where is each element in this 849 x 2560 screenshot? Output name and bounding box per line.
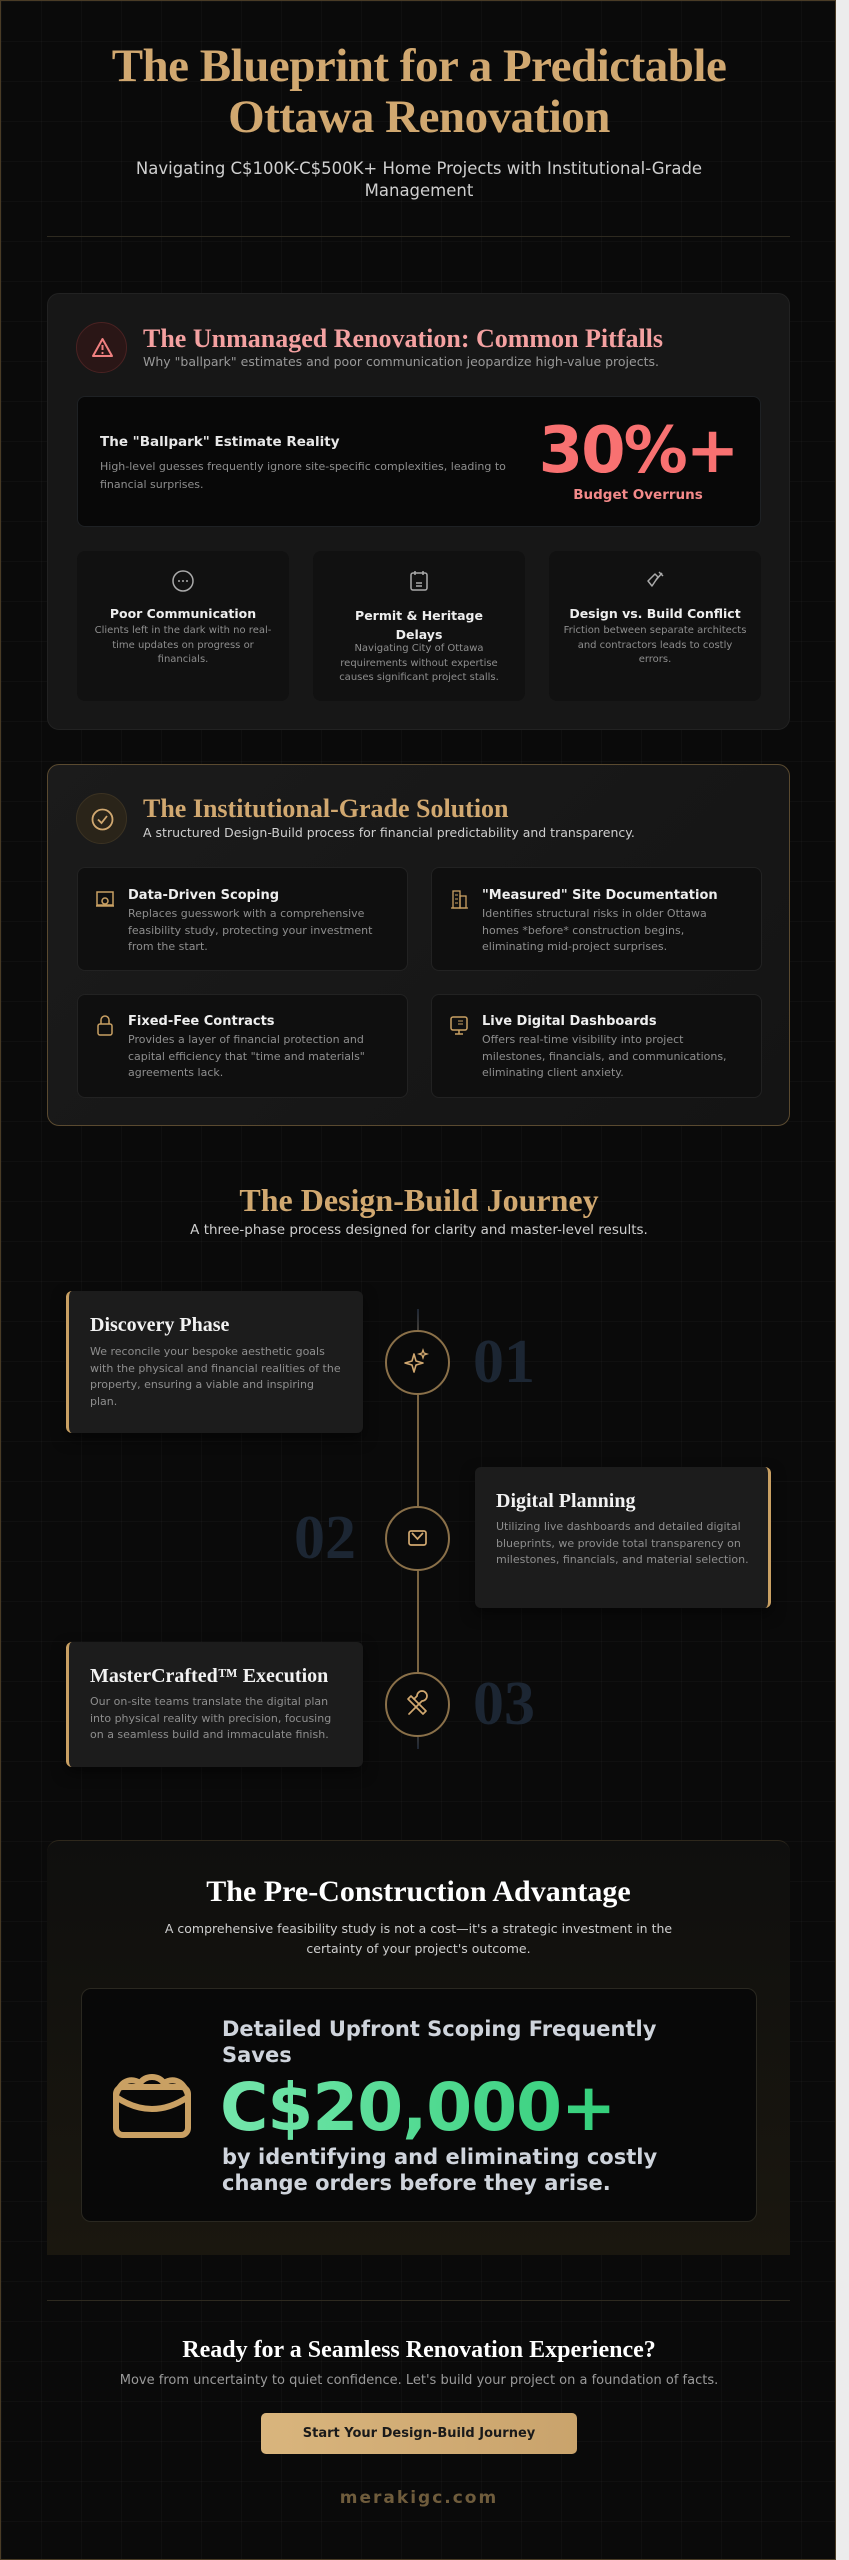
card: data-driven: Replaces guesswork with a comprehensive feasibility study, protecting your investment from the start. [128, 907, 372, 953]
CTA button [261, 2413, 577, 2454]
title: Ottawa Renovation [228, 91, 610, 143]
heading: The Institutional-Grade Solution [143, 794, 509, 823]
phase 1 card: We reconcile your bespoke aesthetic goals with the physical and financial realities of the property, ensuring a viable and inspiring plan. [90, 1345, 341, 1408]
icon: treasure chest [113, 2074, 191, 2138]
card: permit delays: Permit & Heritage [355, 608, 483, 623]
card: dashboards: Live Digital Dashboards [482, 1014, 657, 1029]
card: poor communication [77, 551, 289, 701]
savings box [81, 1988, 757, 2222]
timeline [66, 1291, 771, 1767]
phase 2 card: Digital Planning [496, 1490, 635, 1512]
stat box: Budget Overruns [573, 487, 703, 503]
card: fixed-fee: Fixed-Fee Contracts [128, 1014, 275, 1029]
panel: solution [47, 764, 790, 1126]
subheading: Why "ballpark" estimates and poor communication jeopardize high-value projects. [143, 354, 659, 369]
heading: The Unmanaged Renovation: Common Pitfalls [143, 324, 663, 353]
title: The Blueprint for a Predictable [112, 40, 726, 92]
icon: sparkles [385, 1330, 450, 1395]
savings box: by identifying and eliminating costly change orders before they arise. [222, 2145, 657, 2195]
card: permit delays [313, 551, 525, 701]
icon: envelope [385, 1506, 450, 1571]
phase 3 card: MasterCrafted™ Execution [90, 1665, 328, 1687]
journey heading: The Design-Build Journey [239, 1182, 599, 1218]
phase 1 card [66, 1291, 363, 1433]
card: fixed-fee: Provides a layer of financial protection and capital efficiency that "time and materials" agreements lack. [128, 1033, 365, 1079]
panel: pitfalls [47, 293, 790, 730]
icon: check [76, 793, 127, 844]
card: design vs build [549, 551, 761, 701]
heading: The Pre-Construction Advantage [206, 1875, 631, 1908]
stat box [77, 396, 761, 527]
card: design vs build: Friction between separate architects and contractors leads to costly errors. [564, 625, 746, 665]
phase 1 card: Discovery Phase [90, 1314, 229, 1336]
phase 3 card: Our on-site teams translate the digital plan into physical reality with precision, focusing on a seamless build and immaculate finish. [90, 1695, 331, 1741]
card: measured: "Measured" Site Documentation [482, 888, 718, 903]
card: fixed-fee [77, 994, 408, 1098]
card: dashboards [431, 994, 762, 1098]
journey subheading: A three-phase process designed for clarity and master-level results. [190, 1222, 648, 1238]
panel: pre-construction advantage [47, 1840, 790, 2255]
card: poor communication: Clients left in the dark with no real-time updates on progress or financials. [95, 625, 271, 665]
card: data-driven: Data-Driven Scoping [128, 888, 279, 903]
number 03: 03 [473, 1670, 535, 1738]
stat box: The "Ballpark" Estimate Reality [100, 434, 340, 450]
stat box: High-level guesses frequently ignore site-specific complexities, leading to financial surprises. [100, 460, 506, 491]
CTA heading: Ready for a Seamless Renovation Experience? [182, 2337, 656, 2363]
footer brand: merakigc.com [340, 2488, 498, 2508]
big stat 30%+: 30%+ [539, 414, 737, 488]
CTA text: Move from uncertainty to quiet confidence. Let's build your project on a foundation of facts. [120, 2373, 718, 2388]
phase 3 card [66, 1642, 363, 1767]
card: dashboards: Offers real-time visibility into project milestones, financials, and communications, eliminating client anxiety. [482, 1033, 727, 1079]
subheading: A comprehensive feasibility study is not a cost—it's a strategic investment in the certainty of your project's outcome. [165, 1921, 672, 1956]
subheading: A structured Design-Build process for financial predictability and transparency. [143, 825, 635, 840]
number 01: 01 [473, 1328, 535, 1396]
card: measured [431, 867, 762, 971]
card: data-driven [77, 867, 408, 971]
number 02: 02 [294, 1504, 356, 1572]
title [112, 40, 726, 143]
card: permit delays: Delays [396, 627, 442, 642]
icon: tools [385, 1672, 450, 1737]
card: measured: Identifies structural risks in older Ottawa homes *before* construction begins, eliminating mid-project surprises. [482, 907, 707, 953]
CTA button: Start Your Design-Build Journey [303, 2426, 535, 2441]
phase 2 card [475, 1467, 771, 1608]
icon: warning [76, 322, 127, 373]
big stat C$20,000+: C$20,000+ [220, 2069, 615, 2146]
subtitle: Navigating C$100K-C$500K+ Home Projects with Institutional-Grade Management [136, 159, 702, 200]
phase 2 card: Utilizing live dashboards and detailed digital blueprints, we provide total transparency on milestones, financials, and material selection. [496, 1520, 749, 1566]
card: permit delays: Navigating City of Ottawa requirements without expertise causes significant project stalls. [339, 643, 499, 683]
savings box: Detailed Upfront Scoping Frequently Saves [222, 2017, 656, 2067]
card: design vs build: Design vs. Build Conflict [569, 606, 741, 621]
card: poor communication: Poor Communication [110, 606, 256, 621]
